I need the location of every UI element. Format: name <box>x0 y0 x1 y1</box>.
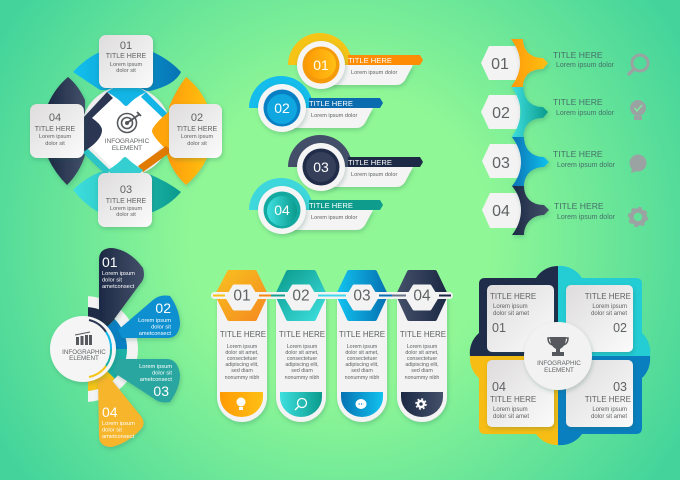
petal 04: 04 <box>102 404 118 420</box>
card 04 <box>487 360 554 427</box>
center label: INFOGRAPHIC <box>537 360 581 367</box>
item 03: 03 <box>492 155 510 172</box>
center label: INFOGRAPHIC <box>62 349 106 356</box>
card 01: dolor sit <box>116 68 136 74</box>
item 01: TITLE HERE <box>553 50 603 60</box>
center label: ELEMENT <box>69 355 99 362</box>
item 04: 04 <box>274 202 290 218</box>
inner arc <box>89 320 111 377</box>
backing quadrant teal <box>558 266 650 356</box>
pill 03: dolor sit amet, <box>345 350 379 356</box>
petal 03: ametconsect <box>140 377 172 383</box>
pill 03: nonummy nibh <box>345 375 379 381</box>
petal 01: Lorem ipsum <box>102 271 135 277</box>
item 01: 01 <box>491 56 509 73</box>
item 01: Lorem ipsum dolor <box>556 62 615 69</box>
icon: gear <box>416 399 426 409</box>
card 02: dolor sit <box>187 141 207 147</box>
item 02: TITLE HERE <box>309 99 353 108</box>
pill 01: adipiscing elit, <box>225 362 259 368</box>
item 03: 03 <box>313 159 329 175</box>
item 03: TITLE HERE <box>553 149 603 159</box>
pill 03: TITLE HERE <box>339 330 385 339</box>
center diamond <box>76 80 176 182</box>
icon: bar chart <box>75 332 92 345</box>
panel: four pills bottom center <box>211 272 453 422</box>
backing quadrant navy <box>470 266 558 356</box>
card 04: Lorem ipsum <box>39 134 71 140</box>
backing quadrant yellow <box>470 356 558 445</box>
panel: vertical connector list top right <box>481 39 648 235</box>
item 01: Lorem ipsum dolor <box>351 70 397 76</box>
card 04: TITLE HERE <box>490 395 536 404</box>
card 03: TITLE HERE <box>585 395 631 404</box>
panel: half radial bottom left <box>38 248 180 447</box>
petal 03 <box>113 359 180 402</box>
icon: target <box>118 112 141 132</box>
center circle <box>524 322 592 390</box>
connecting tube <box>211 292 453 299</box>
pill 02: Lorem ipsum <box>287 344 318 350</box>
petal 02 <box>118 296 180 338</box>
item 04 <box>482 186 616 235</box>
card 02: 02 <box>613 321 627 335</box>
item 02: 02 <box>492 105 510 122</box>
card 01: Lorem ipsum <box>493 304 528 310</box>
petal 04: Lorem ipsum <box>102 421 135 427</box>
petal 02: 02 <box>155 300 171 316</box>
pill 01: sed diam <box>231 368 253 374</box>
item 02: Lorem ipsum dolor <box>311 113 357 119</box>
item 02: Lorem ipsum dolor <box>556 110 615 117</box>
pill 04: nonummy nibh <box>405 375 439 381</box>
card 01: TITLE HERE <box>106 53 147 60</box>
panel: numbered banners top center <box>249 33 423 234</box>
item 03 <box>288 135 423 191</box>
card 02: Lorem ipsum <box>181 134 213 140</box>
item 02 <box>481 87 615 137</box>
pill 02: adipiscing elit, <box>285 362 319 368</box>
pill 02: nonummy nibh <box>285 375 319 381</box>
card 04: TITLE HERE <box>35 126 76 133</box>
card 02 <box>566 285 633 352</box>
pill 04: dolor sit amet, <box>405 350 439 356</box>
card 01: Lorem ipsum <box>110 62 142 68</box>
number hexagons: 04 <box>413 288 431 304</box>
number hexagons: 03 <box>353 288 371 304</box>
icon: light bulb <box>236 398 246 410</box>
panel: four cards with trophy bottom right <box>470 266 650 445</box>
petal 01 blue <box>73 52 181 91</box>
center ring <box>81 86 171 176</box>
card 02: TITLE HERE <box>177 126 218 133</box>
pill 02: TITLE HERE <box>279 330 325 339</box>
petal 04: dolor sit <box>102 428 122 434</box>
item 01: TITLE HERE <box>348 56 392 65</box>
petal 02: dolor sit <box>151 324 171 330</box>
pill 01: consectetuer <box>227 356 257 362</box>
icon: light bulb <box>630 100 646 120</box>
item 01 <box>481 39 615 87</box>
center label: ELEMENT <box>544 367 574 374</box>
petal 04 navy <box>48 77 85 185</box>
item 03: Lorem ipsum dolor <box>557 162 616 169</box>
card 01 <box>487 285 554 352</box>
number hexagons <box>227 286 437 309</box>
pill 04: Lorem ipsum <box>407 344 438 350</box>
card 03 <box>98 173 152 227</box>
card 02: 02 <box>191 112 203 124</box>
card 03: Lorem ipsum <box>592 407 627 413</box>
petal 04 <box>98 378 144 447</box>
pill 02 <box>276 272 326 422</box>
item 03 <box>482 137 616 186</box>
card 03: dolor sit amet <box>591 414 627 420</box>
icon: gear <box>629 208 647 226</box>
item 04: TITLE HERE <box>554 201 604 211</box>
petal 01 <box>99 248 144 322</box>
pill 04: TITLE HERE <box>400 330 446 339</box>
pill 03: consectetuer <box>347 356 377 362</box>
number hexagons: 02 <box>292 288 310 304</box>
pill 02: dolor sit amet, <box>285 350 319 356</box>
item 03: TITLE HERE <box>348 158 392 167</box>
panel: circular infographic top left <box>30 35 222 227</box>
card 02: dolor sit amet <box>591 311 627 317</box>
card 01: 01 <box>120 40 132 52</box>
item 02 <box>249 76 383 132</box>
icon: trophy <box>548 337 568 356</box>
petal 03: dolor sit <box>152 370 172 376</box>
card 03: 03 <box>120 184 132 196</box>
card 04: dolor sit <box>45 141 65 147</box>
item 02: 02 <box>274 100 290 116</box>
item 04: Lorem ipsum dolor <box>557 214 616 221</box>
card 01 <box>99 35 153 88</box>
petal 03: 03 <box>153 383 169 399</box>
pill 04 <box>397 272 447 422</box>
pill 04: sed diam <box>411 368 433 374</box>
item 04: 04 <box>492 203 510 220</box>
pill 04: consectetuer <box>407 356 437 362</box>
card 03 <box>566 360 633 427</box>
petal 03: Lorem ipsum <box>139 364 172 370</box>
item 01 <box>288 33 423 89</box>
card 02 <box>169 104 222 158</box>
card 04 <box>30 104 84 158</box>
icon: magnifier <box>628 55 648 75</box>
pill 04: adipiscing elit, <box>405 362 439 368</box>
card 02: Lorem ipsum <box>592 304 627 310</box>
card 01: TITLE HERE <box>490 292 536 301</box>
pill 01: Lorem ipsum <box>227 344 258 350</box>
item 04: Lorem ipsum dolor <box>311 215 357 221</box>
item 04: TITLE HERE <box>309 201 353 210</box>
pill 01: nonummy nibh <box>225 375 259 381</box>
center label: ELEMENT <box>112 145 142 152</box>
icon: chat bubble <box>630 154 646 173</box>
number hexagons: 01 <box>233 288 251 304</box>
band segments <box>72 85 172 180</box>
pill 01: TITLE HERE <box>220 330 266 339</box>
pill 01 <box>217 272 267 422</box>
pill 03: adipiscing elit, <box>345 362 379 368</box>
card 02: TITLE HERE <box>585 292 631 301</box>
pill 01: dolor sit amet, <box>225 350 259 356</box>
card 04: Lorem ipsum <box>493 407 528 413</box>
pill 03: Lorem ipsum <box>347 344 378 350</box>
item 02: TITLE HERE <box>553 97 603 107</box>
card 03: Lorem ipsum <box>110 206 142 212</box>
card 01: dolor sit amet <box>493 311 529 317</box>
petal 03 teal <box>73 172 181 212</box>
pill 02: sed diam <box>291 368 313 374</box>
card 03: TITLE HERE <box>106 198 147 205</box>
petal 04: ametconsect <box>102 434 135 440</box>
icon: magnifier <box>295 398 306 410</box>
item 01: 01 <box>313 57 329 73</box>
card 03: dolor sit <box>116 212 136 218</box>
petal 01: ametconsect <box>102 284 135 290</box>
card 03: 03 <box>613 380 627 394</box>
pill 03: sed diam <box>351 368 373 374</box>
backing quadrant blue <box>558 356 650 445</box>
petal 02 orange <box>167 77 207 185</box>
center label: INFOGRAPHIC <box>105 138 150 145</box>
pill 03 <box>337 272 387 422</box>
center circle <box>50 316 116 382</box>
card 04: 04 <box>49 112 61 124</box>
pill 02: consectetuer <box>287 356 317 362</box>
item 03: Lorem ipsum dolor <box>351 172 397 178</box>
card 01: 01 <box>492 321 506 335</box>
card 04: dolor sit amet <box>493 414 529 420</box>
petal 01: 01 <box>102 254 118 270</box>
item 04 <box>249 178 383 234</box>
segmented ring <box>88 296 138 402</box>
petal 01: dolor sit <box>102 278 122 284</box>
petal 02: ametconsect <box>139 331 171 337</box>
petal 02: Lorem ipsum <box>138 318 171 324</box>
icon: chat <box>356 399 366 409</box>
card 04: 04 <box>492 380 506 394</box>
